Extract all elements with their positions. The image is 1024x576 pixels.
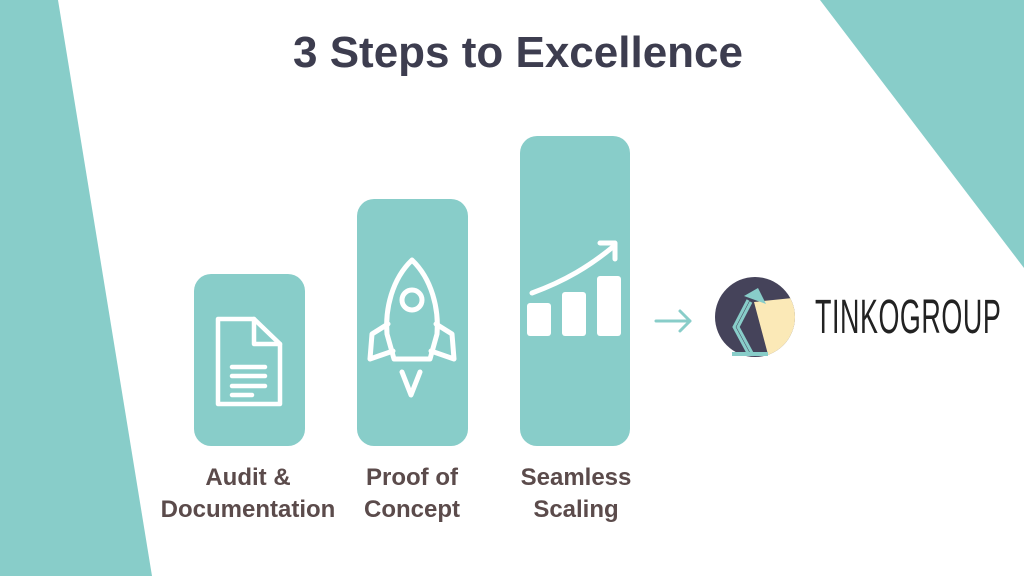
panel: audit	[194, 274, 305, 446]
logo	[715, 277, 1001, 357]
label: audit	[161, 464, 335, 523]
label: proof	[364, 464, 460, 523]
label: proof: Concept	[364, 496, 460, 523]
label: scaling	[521, 464, 631, 523]
label: proof: Proof of	[366, 464, 458, 491]
label: scaling: Scaling	[533, 496, 619, 523]
label: audit: Documentation	[161, 496, 335, 523]
logo text: TINKOGROUP	[815, 291, 1001, 344]
panel: seamless scaling	[520, 136, 630, 446]
panel: proof of concept	[357, 199, 468, 446]
label: audit: Audit &	[205, 464, 291, 491]
title: 3 Steps to Excellence	[293, 28, 743, 77]
label: scaling: Seamless	[521, 464, 631, 491]
icon: growth chart	[527, 240, 621, 336]
icon: lamp circle	[715, 277, 795, 357]
icon: document	[216, 316, 282, 406]
arrow	[654, 309, 692, 332]
icon: rocket	[368, 258, 456, 398]
